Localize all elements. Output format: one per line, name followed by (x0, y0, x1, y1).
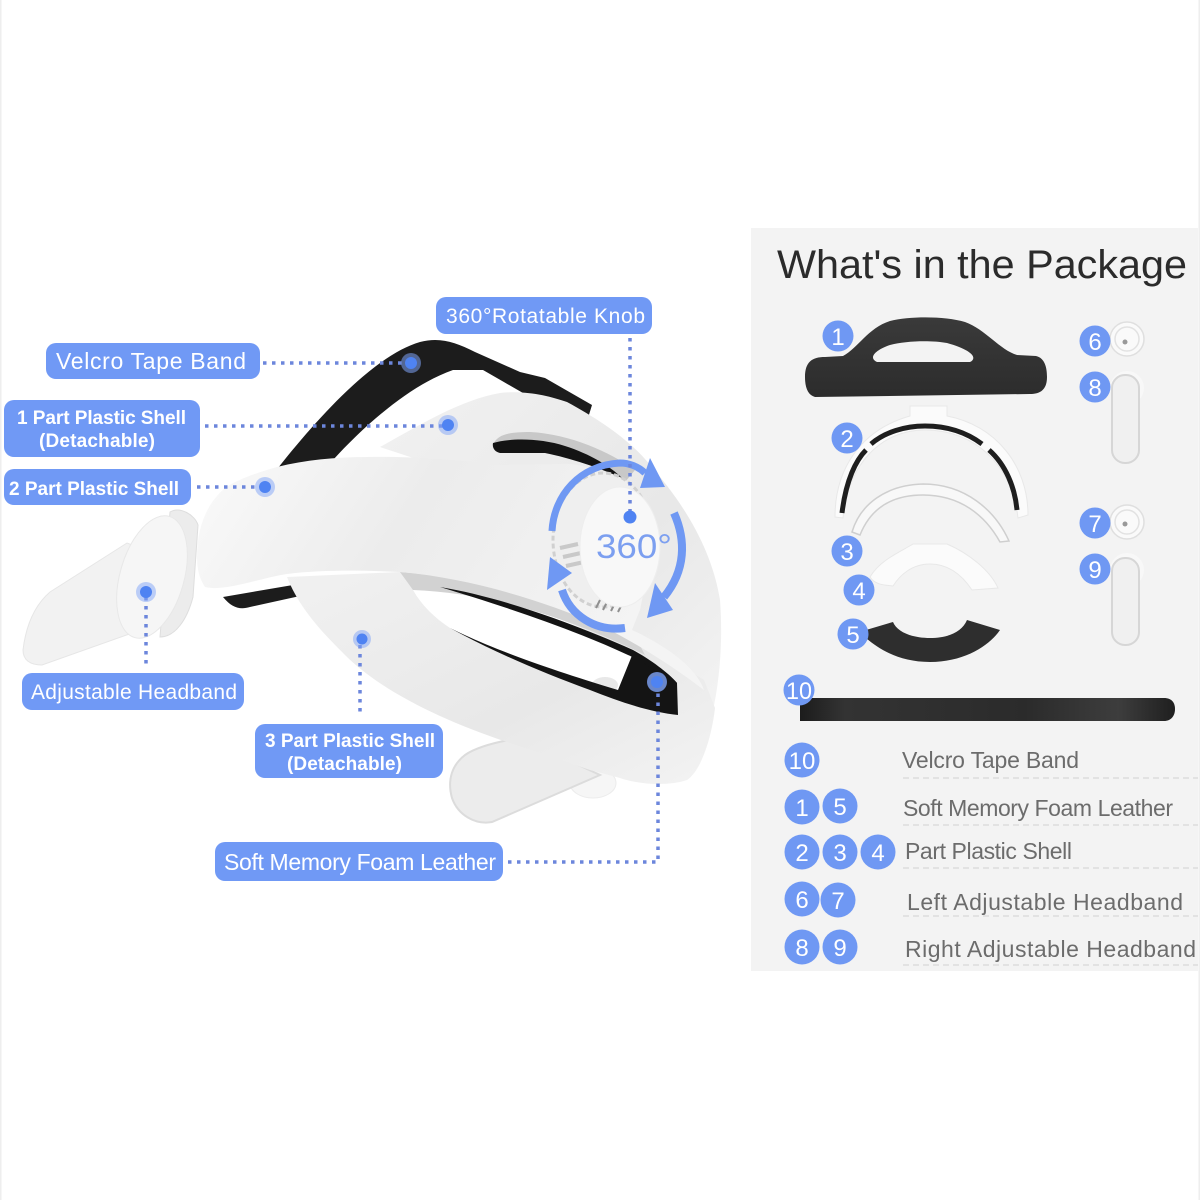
legend row: part plastic shell: 3 (833, 840, 847, 867)
headset illustration (23, 340, 721, 823)
panel: what's in the package (751, 228, 1198, 971)
callout: 3 part plastic shell (255, 630, 443, 778)
callout: 360 rotatable knob: 360°Rotatable Knob (446, 305, 645, 328)
part 4: plastic shell: 4 (852, 578, 866, 605)
part 9: right adjuster paddle: 9 (1088, 557, 1102, 584)
part 6: left adjuster disc (1080, 322, 1144, 356)
legend row: velcro tape band: Velcro Tape Band (902, 747, 1079, 773)
360 degree rotation arrows (547, 458, 682, 629)
legend row: soft memory foam leather (784, 788, 1173, 824)
part 7: left adjuster disc (1080, 505, 1144, 539)
opening grey inner edge (400, 572, 645, 655)
part 5: foam pad (838, 618, 1000, 662)
legend list (784, 742, 1198, 965)
part 6: left adjuster disc: 6 (1088, 329, 1102, 356)
legend row: soft memory foam leather: 1 (795, 795, 809, 822)
part 9: right adjuster paddle (1080, 553, 1144, 645)
callout: adjustable headband (22, 582, 244, 710)
callout: adjustable headband: Adjustable Headband (31, 681, 237, 704)
legend row: part plastic shell: 2 (795, 840, 809, 867)
heading: package: What's in the Package (777, 243, 1187, 287)
part 3: plastic shell: 3 (840, 539, 854, 566)
part 1: foam pad (805, 317, 1047, 397)
lower paddle (450, 738, 616, 823)
part 3: plastic shell (832, 484, 1009, 566)
part 8: right adjuster paddle: 8 (1088, 375, 1102, 402)
legend row: left adjustable headband: Left Adjustable Headband (907, 889, 1183, 915)
lower plastic shell (287, 572, 715, 784)
part 5: foam pad: 5 (846, 622, 860, 649)
callout: soft memory foam leather: Soft Memory Foam Leather (224, 849, 496, 875)
callout: 360 rotatable knob (436, 297, 652, 524)
legend row: part plastic shell: 4 (871, 840, 885, 867)
legend row: left adjustable headband: 7 (831, 888, 845, 915)
legend row: part plastic shell: Part Plastic Shell (905, 838, 1072, 864)
legend row: part plastic shell (784, 834, 1072, 870)
legend row: left adjustable headband: 6 (795, 887, 809, 914)
part 2: plastic shell with strap: 2 (840, 426, 854, 453)
callout: 2 part plastic shell (4, 469, 275, 505)
velcro top strap (278, 340, 592, 468)
part 7: left adjuster disc: 7 (1088, 511, 1102, 538)
lower opening black lining (440, 587, 678, 715)
legend row: right adjustable headband: Right Adjustable Headband (905, 936, 1196, 962)
legend row: right adjustable headband: 9 (833, 935, 847, 962)
left adjuster disc (104, 508, 200, 646)
legend row: velcro tape band: 10 (789, 748, 815, 775)
left adjuster paddle (23, 543, 170, 665)
callout: 1 part plastic shell: (Detachable) (39, 431, 155, 452)
upper shell slot (493, 432, 635, 482)
upper plastic shell (380, 392, 721, 715)
knob gear ring (553, 473, 653, 612)
part 10: velcro strap (784, 674, 1175, 721)
lower black pad (223, 585, 315, 615)
callout: velcro tape band (46, 343, 421, 379)
part 10: velcro strap: 10 (786, 678, 812, 705)
legend row: soft memory foam leather: Soft Memory Foam Leather (903, 795, 1173, 821)
legend row: soft memory foam leather: 5 (833, 794, 847, 821)
legend row: right adjustable headband (784, 930, 1196, 964)
callout: 2 part plastic shell: 2 Part Plastic Shell (9, 479, 179, 500)
knob face (580, 487, 660, 607)
part 2: plastic shell with strap (832, 406, 1028, 518)
callout: 1 part plastic shell (4, 400, 458, 457)
part 1: foam pad: 1 (831, 324, 845, 351)
callout: velcro tape band: Velcro Tape Band (56, 348, 246, 374)
callout: 3 part plastic shell: (Detachable) (287, 754, 402, 775)
lower opening (413, 589, 678, 715)
legend row: velcro tape band (784, 742, 1079, 778)
legend row: right adjustable headband: 8 (795, 935, 809, 962)
part 4: plastic shell (844, 544, 998, 606)
360 degree text: 360° (596, 528, 672, 566)
callout: soft memory foam leather (215, 672, 667, 881)
part 8: right adjuster paddle (1080, 371, 1144, 463)
callout: 3 part plastic shell: 3 Part Plastic Shell (265, 731, 435, 752)
callout: 1 part plastic shell: 1 Part Plastic Shell (17, 408, 186, 429)
main headband shell (197, 457, 704, 690)
legend row: left adjustable headband (784, 882, 1183, 918)
left adjuster ring (160, 510, 198, 637)
